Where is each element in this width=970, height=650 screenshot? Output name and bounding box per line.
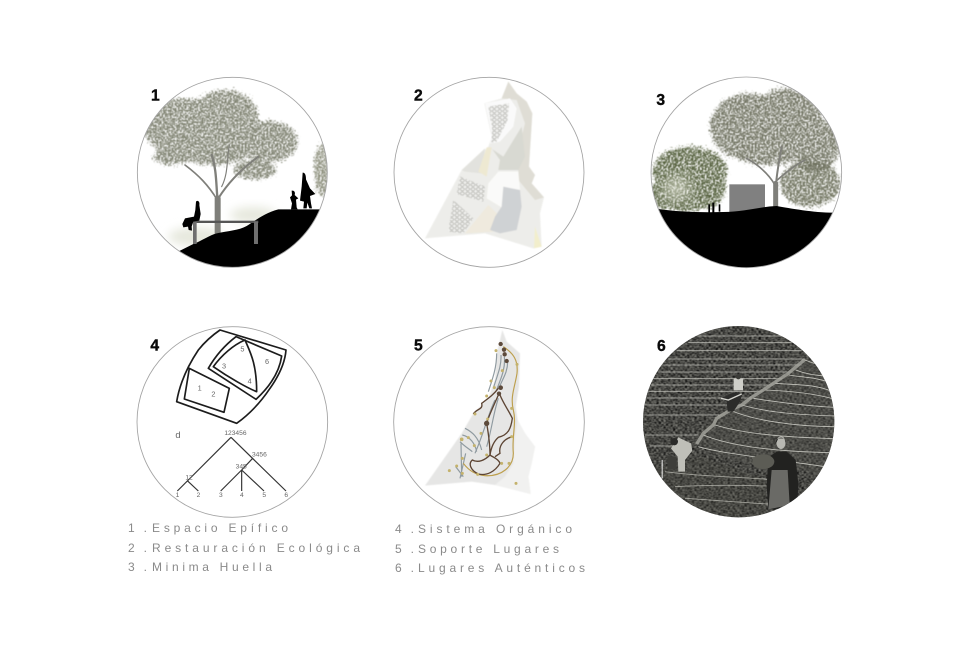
legend item 6: Lugares Auténticos: [418, 561, 585, 575]
gold node markers: [448, 349, 518, 485]
bench: [193, 221, 258, 244]
woman in foreground: [752, 436, 798, 509]
legend item 4: 4.: [395, 522, 414, 536]
tree labels: 2: [197, 492, 201, 499]
woman silhouette: [300, 173, 315, 208]
legend item 1: Espacio Epífico: [152, 521, 288, 535]
tree labels: [175, 430, 288, 499]
tree labels: 1: [176, 492, 180, 499]
circle outline 3: [651, 77, 842, 268]
lower field: [652, 457, 767, 517]
hatch patterns: [448, 103, 509, 233]
top worker: [721, 374, 743, 412]
region numbers: 1: [198, 384, 202, 393]
gray streams: [456, 353, 508, 478]
legend item 5: 5.: [395, 542, 414, 556]
panel 4: sistema orgánico diagram: [137, 327, 328, 517]
panel 6: lugares auténticos photo: [642, 325, 837, 518]
small figures: [708, 203, 720, 213]
left worker: [662, 437, 692, 478]
large tree canopy: [710, 88, 840, 172]
left tree inner glow: [663, 176, 691, 200]
legend item 2: Restauración Ecológica: [152, 541, 360, 555]
legend item 2: 2.: [128, 541, 147, 555]
panel 3: mínima huella: [650, 76, 842, 268]
legend item 1: 1.: [128, 521, 147, 535]
panel 5: soporte lugares map: [394, 327, 584, 517]
terraced mound: [695, 358, 835, 477]
legend item 3: Minima Huella: [152, 560, 272, 574]
tree canopy: [145, 90, 298, 179]
legend item 5: Soporte Lugares: [418, 542, 559, 556]
ground: [658, 206, 832, 268]
number 5: 5: [414, 338, 423, 355]
region numbers: [198, 345, 269, 399]
photo base: [642, 325, 837, 518]
tree labels: 4: [240, 492, 244, 499]
left tree foliage: [651, 147, 727, 212]
base map: [425, 330, 535, 494]
brown routes: [470, 388, 512, 474]
large tree trunk: [747, 147, 805, 207]
number 4: 4: [150, 338, 159, 355]
number 1: 1: [151, 87, 160, 104]
region numbers: 4: [248, 376, 252, 385]
right edge tree: [314, 144, 331, 196]
box volume: [729, 184, 765, 213]
tree labels: 345: [236, 463, 247, 470]
mist behind hillside: [168, 207, 277, 246]
tree labels: 5: [262, 492, 266, 499]
seated person: [182, 201, 201, 231]
tree labels: d: [175, 430, 181, 440]
region numbers: 3: [222, 361, 226, 370]
region numbers: 5: [240, 345, 244, 354]
child silhouette: [290, 191, 298, 209]
main node markers: [484, 342, 509, 426]
photo grain: [642, 325, 837, 518]
legend left column: [128, 521, 360, 574]
ground: [180, 209, 320, 267]
number 6: 6: [657, 338, 666, 355]
circle outline 1: [137, 77, 327, 267]
legend right column: [395, 522, 585, 575]
region numbers: 2: [211, 390, 215, 399]
site map zones: [425, 82, 544, 248]
tree labels: 3456: [252, 452, 267, 459]
legend item 6: 6.: [395, 561, 414, 575]
tree diagram: [177, 437, 286, 491]
tree labels: 12: [185, 474, 193, 481]
legend item 4: Sistema Orgánico: [418, 522, 572, 536]
nested regions: [177, 330, 286, 423]
mound crest: [697, 359, 805, 444]
circle outline 2: [394, 77, 584, 267]
gold path: [463, 347, 517, 476]
right small tree: [780, 160, 840, 207]
number 2: 2: [414, 88, 423, 105]
circle outline 4: [137, 327, 328, 517]
region numbers: 6: [265, 357, 269, 366]
circle outline 5: [394, 327, 584, 517]
tree labels: 3: [219, 492, 223, 499]
tree trunk and branches: [185, 145, 258, 233]
tree labels: 6: [284, 492, 288, 499]
mound terrace lines: [665, 360, 835, 504]
number 3: 3: [656, 92, 665, 109]
panel 1: espacio epífico: [137, 77, 331, 283]
panel 2: restauración ecológica: [394, 77, 584, 267]
left terrace lines: [644, 336, 805, 446]
tree labels: 123456: [224, 430, 247, 437]
legend item 3: 3.: [128, 560, 147, 574]
